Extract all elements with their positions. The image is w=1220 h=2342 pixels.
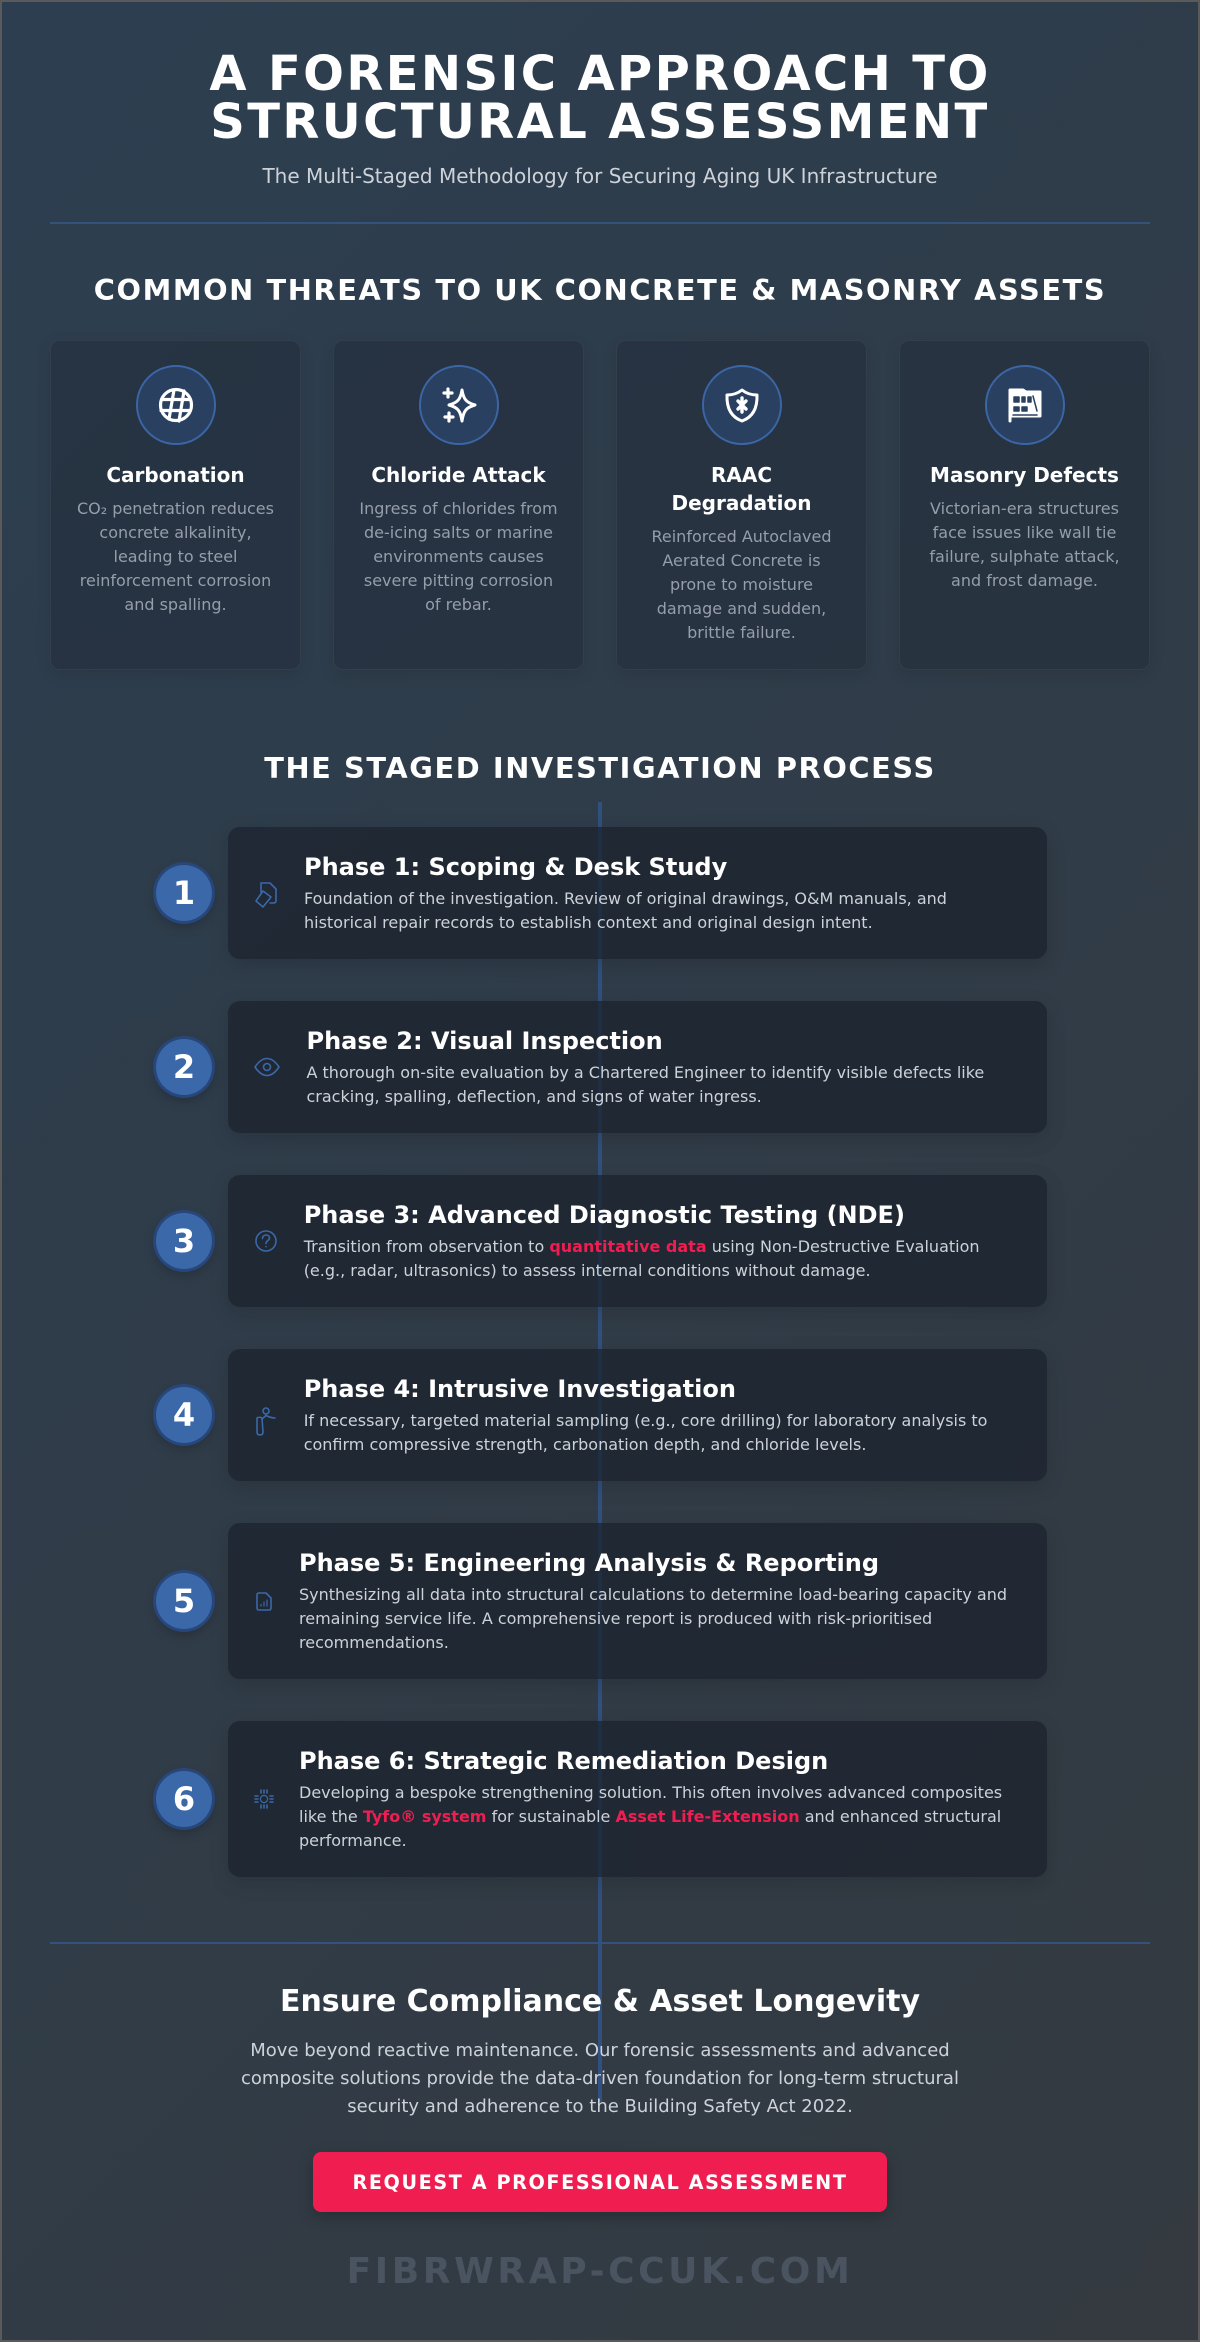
text: chloride attack: de-icing salts or marine <box>364 523 553 542</box>
card: phase 3: Transition from observation to quantitative data using Non-Destructive Evaluation <box>304 1237 980 1256</box>
icon: document chart <box>256 1592 272 1611</box>
card: phase 2: A thorough on-site evaluation by a Chartered Engineer to identify visible defects like <box>306 1063 984 1082</box>
button: request assessment: REQUEST A PROFESSIONAL ASSESSMENT <box>352 2171 848 2194</box>
text: carbonation: CO₂ penetration reduces <box>77 499 274 518</box>
number badge 5 <box>156 1573 212 1629</box>
card: phase 4: confirm compressive strength, carbonation depth, and chloride levels. <box>304 1435 866 1454</box>
icon: question circle <box>255 1230 277 1252</box>
text: chloride attack: Ingress of chlorides from <box>359 499 558 518</box>
text: chloride attack: of rebar. <box>425 595 492 614</box>
text: phase 6: Phase 6: Strategic Remediation Design <box>299 1747 828 1775</box>
card: phase 4: If necessary, targeted material sampling (e.g., core drilling) for laboratory analysis to <box>304 1411 987 1430</box>
card: phase 1: historical repair records to establish context and original design intent. <box>304 913 873 932</box>
heading: common threats: COMMON THREATS TO UK CONCRETE & MASONRY ASSETS <box>94 273 1106 307</box>
panel: phase 1 <box>153 827 1047 966</box>
text: closing paragraph: security and adherence to the Building Safety Act 2022. <box>347 2096 853 2116</box>
heading: staged investigation: THE STAGED INVESTIGATION PROCESS <box>264 750 936 784</box>
text: RAAC degradation: brittle failure. <box>687 623 796 642</box>
card: phase 5: Synthesizing all data into structural calculations to determine load-bearing capacity and <box>299 1585 1007 1604</box>
icon: masonry wall <box>984 365 1064 445</box>
heading: RAAC degradation: Degradation <box>671 491 812 515</box>
number badge 4: 4 <box>173 1396 195 1434</box>
number badge 5: 5 <box>173 1582 195 1620</box>
text: closing paragraph <box>241 2040 959 2116</box>
panel: phase 5 <box>153 1523 1047 1686</box>
text: chloride attack <box>359 499 558 614</box>
number badge 2 <box>156 1039 212 1095</box>
number badge 4 <box>156 1387 212 1443</box>
text: closing paragraph: Move beyond reactive maintenance. Our forensic assessments and advanced <box>250 2040 950 2060</box>
text: RAAC degradation: damage and sudden, <box>657 599 826 618</box>
title: STRUCTURAL ASSESSMENT <box>210 94 990 150</box>
text: chloride attack: severe pitting corrosion <box>364 571 553 590</box>
text: RAAC degradation: Reinforced Autoclaved <box>651 527 832 546</box>
icon: gear component <box>254 1789 274 1809</box>
icon: globe <box>136 365 216 445</box>
card: phase 6: like the Tyfo® system for sustainable Asset Life-Extension and enhanced structural <box>299 1807 1001 1826</box>
button: request assessment <box>313 2152 887 2212</box>
heading: masonry defects: Masonry Defects <box>930 463 1119 487</box>
panel: phase 3 <box>153 1175 1047 1314</box>
text: masonry defects: failure, sulphate attack, <box>929 547 1120 566</box>
text: phase 2: Phase 2: Visual Inspection <box>306 1027 663 1055</box>
icon: sparkles <box>418 365 498 445</box>
card: phase 3 <box>228 1175 1047 1307</box>
icon: document with tag <box>255 882 277 908</box>
text: RAAC degradation <box>651 527 832 642</box>
card: phase 2 <box>228 1001 1047 1133</box>
text: carbonation: and spalling. <box>124 595 227 614</box>
card: phase 4 <box>228 1349 1047 1481</box>
number badge 2: 2 <box>173 1048 195 1086</box>
panel: phase 4 <box>153 1349 1047 1488</box>
text: masonry defects: Victorian-era structures <box>930 499 1119 518</box>
icon: shield <box>702 365 782 445</box>
panel: phase 6 <box>153 1721 1047 1884</box>
heading: carbonation: Carbonation <box>106 463 245 487</box>
card: phase 5 <box>228 1523 1047 1679</box>
heading: ensure compliance: Ensure Compliance & Asset Longevity <box>280 1984 920 2019</box>
text: chloride attack: environments causes <box>373 547 544 566</box>
panel: masonry defects <box>899 340 1150 670</box>
number badge 3: 3 <box>173 1222 195 1260</box>
timeline line <box>598 802 602 2102</box>
text: phase 4: Phase 4: Intrusive Investigation <box>304 1375 736 1403</box>
icon: eye <box>254 1058 280 1076</box>
text: phase 3: Phase 3: Advanced Diagnostic Testing (NDE) <box>304 1201 905 1229</box>
text: carbonation: concrete alkalinity, <box>99 523 252 542</box>
text: phase 5: Phase 5: Engineering Analysis & Reporting <box>299 1549 879 1577</box>
text: masonry defects: face issues like wall tie <box>933 523 1116 542</box>
panel: carbonation <box>50 340 301 670</box>
card: phase 1 <box>228 827 1047 959</box>
text: RAAC degradation: Aerated Concrete is <box>662 551 821 570</box>
card: phase 6: performance. <box>299 1831 407 1850</box>
heading: chloride attack: Chloride Attack <box>371 463 546 487</box>
number badge 6 <box>156 1771 212 1827</box>
icon: person <box>256 1407 276 1436</box>
card: phase 3: (e.g., radar, ultrasonics) to assess internal conditions without damage. <box>304 1261 871 1280</box>
text: carbonation: reinforcement corrosion <box>80 571 271 590</box>
card: phase 5: recommendations. <box>299 1633 449 1652</box>
title <box>209 46 991 150</box>
card: phase 6 <box>228 1721 1047 1877</box>
number badge 3 <box>156 1213 212 1269</box>
card: phase 5: remaining service life. A comprehensive report is produced with risk-prioritised <box>299 1609 932 1628</box>
number badge 1: 1 <box>173 874 195 912</box>
card: phase 2: cracking, spalling, deflection, and signs of water ingress. <box>306 1087 762 1106</box>
subtitle: The Multi-Staged Methodology for Securing Aging UK Infrastructure <box>262 164 938 188</box>
number badge 6: 6 <box>173 1780 195 1818</box>
text: phase 1: Phase 1: Scoping & Desk Study <box>304 853 727 881</box>
text: masonry defects: and frost damage. <box>951 571 1098 590</box>
text: closing paragraph: composite solutions provide the data-driven foundation for long-term structural <box>241 2068 959 2088</box>
card: phase 1: Foundation of the investigation. Review of original drawings, O&M manuals, and <box>304 889 947 908</box>
panel: RAAC degradation <box>616 340 867 670</box>
text: masonry defects <box>929 499 1120 590</box>
number badge 1 <box>156 865 212 921</box>
panel: phase 2 <box>153 1001 1047 1140</box>
text: RAAC degradation: prone to moisture <box>670 575 813 594</box>
title: A FORENSIC APPROACH TO <box>209 46 991 102</box>
text: carbonation: leading to steel <box>114 547 237 566</box>
heading: RAAC degradation <box>671 463 812 515</box>
panel: chloride attack <box>333 340 584 670</box>
text: carbonation <box>77 499 274 614</box>
heading: RAAC degradation: RAAC <box>711 463 772 487</box>
footer: website: FIBRWRAP-CCUK.COM <box>347 2251 853 2292</box>
card: phase 6: Developing a bespoke strengthening solution. This often involves advanced composites <box>299 1783 1002 1802</box>
